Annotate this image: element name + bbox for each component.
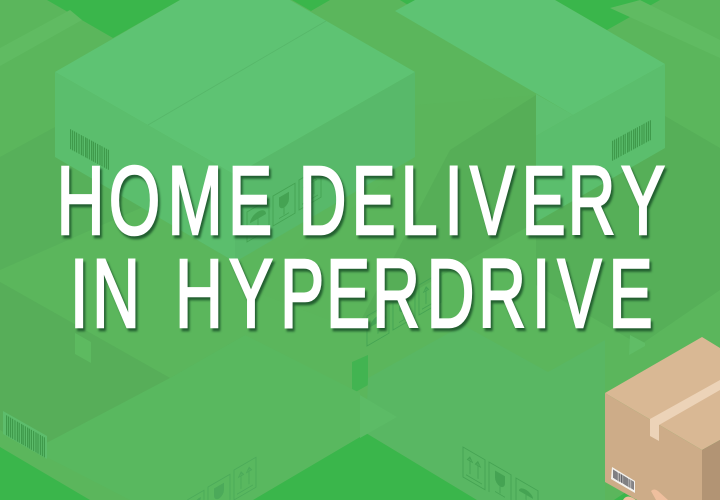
- handling icon: glass: [208, 474, 230, 500]
- lower-left box details: [3, 411, 256, 500]
- barcode: [613, 120, 650, 161]
- box: left shaded side: [0, 127, 245, 378]
- green gap under box: [614, 492, 640, 500]
- tape: [650, 380, 720, 441]
- large box upper left: [55, 0, 415, 262]
- handling icon: arrows: [419, 272, 441, 315]
- handling icon: umbrella: [367, 303, 389, 346]
- right face: [702, 440, 720, 500]
- barcode label: [3, 411, 47, 459]
- barcode: [7, 415, 44, 457]
- top face: [395, 0, 665, 115]
- left face: [55, 72, 235, 262]
- barcode: [71, 129, 108, 170]
- handling icon: glass: [393, 287, 415, 330]
- left face: [605, 393, 702, 500]
- barcode bars: [613, 470, 633, 490]
- lower-right box icons: [463, 447, 538, 500]
- large box upper right: [395, 0, 665, 222]
- barcode label: [611, 467, 635, 493]
- box: lower-left light side: [33, 335, 360, 500]
- middle faded icons: [367, 272, 441, 346]
- title line 1: HOME DELIVERY: [57, 146, 665, 255]
- right face: [235, 72, 415, 262]
- title: [57, 146, 665, 348]
- handling icon: arrows: [234, 457, 256, 500]
- handling icon: glass: [273, 183, 295, 226]
- box: lower-left dark side: [0, 282, 170, 452]
- strap seam: [148, 21, 326, 125]
- box: upper-left strap: [0, 10, 82, 66]
- box: centre shaded side: [250, 95, 536, 330]
- inner flap triangle: [536, 94, 573, 136]
- hand right: [651, 490, 668, 500]
- handling icon: glass: [489, 462, 511, 500]
- box: small flaps: [75, 333, 91, 363]
- handling icon: umbrella: [516, 478, 538, 500]
- box: left lighter side: [0, 207, 245, 378]
- hand left: [623, 496, 636, 500]
- handling icon: arrows: [299, 167, 321, 210]
- handling icon: arrows: [463, 447, 485, 490]
- cardboard box: [605, 337, 720, 500]
- title line 2: IN HYPERDRIVE: [70, 239, 653, 348]
- box: right shaded side: [536, 116, 720, 345]
- handling icon: umbrella: [247, 199, 269, 242]
- handling icon: umbrella: [187, 490, 204, 500]
- box: lower-right side: [366, 325, 605, 500]
- top face: [55, 0, 415, 175]
- right face: [536, 64, 665, 222]
- top face: [605, 337, 720, 450]
